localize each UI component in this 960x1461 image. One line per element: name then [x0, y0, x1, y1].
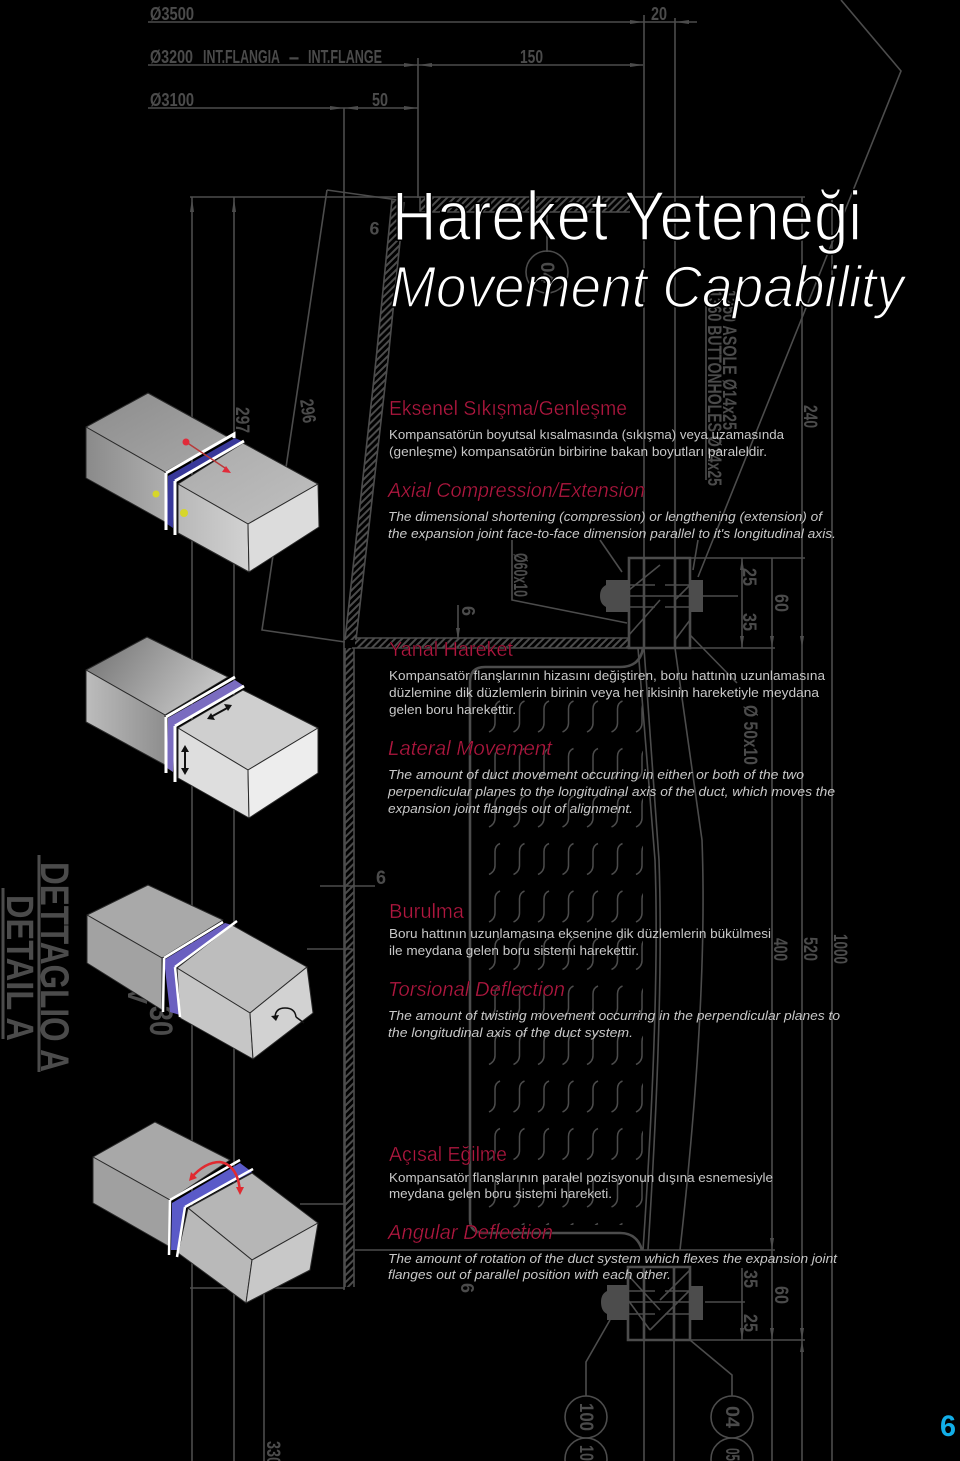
text block: Turkish: ile meydana gelen boru sistemi harekettir. [389, 943, 639, 958]
text block: Turkish [389, 926, 771, 958]
heading: Turkish: Açısal Eğilme [389, 1144, 507, 1166]
dimension labels: 1250 ASOLE Ø14x25 [718, 290, 739, 430]
dimension labels: Ø3100 [150, 90, 194, 110]
text block: English [388, 1008, 840, 1040]
text block: Turkish: düzlemine dik düzlemlerin birinin veya her ikisinin hareketiyle meydana [389, 685, 820, 700]
dimension labels: Ø3200 [150, 47, 193, 67]
dimension labels: 60 [770, 594, 791, 612]
dimension labels: Ø3500 [150, 4, 194, 24]
dimension labels: 35 [738, 613, 759, 631]
text block: English: The amount of duct movement occurring in either or both of the two [388, 767, 804, 782]
text block: English: perpendicular planes to the longitudinal axis of the duct, which moves the [387, 784, 835, 799]
text block: Turkish [389, 427, 785, 459]
dimension labels: V [122, 987, 153, 1004]
text block: Turkish: Kompansatörün boyutsal kısalmasında (sıkışma) veya uzamasında [389, 427, 785, 442]
heading: English: Axial Compression/Extension [387, 480, 645, 502]
heading: English: Torsional Deflection [388, 979, 565, 1001]
dimension labels: 50 [372, 90, 388, 110]
lower flange, bolt and reference balloons [526, 251, 753, 1461]
text block: English: the longitudinal axis of the duct system. [388, 1025, 633, 1040]
icon: axial compression/extension block [86, 393, 319, 572]
dimension labels: 6 [458, 606, 478, 616]
panel: lateral movement text [387, 639, 835, 816]
dimension labels: Ø60x10 [509, 553, 530, 597]
dimension labels: INT.FLANGIA [203, 47, 280, 67]
text block: English [387, 767, 835, 816]
dimension labels [122, 4, 850, 1461]
dimension labels: - [288, 47, 300, 67]
dimension labels: 25 [739, 1314, 760, 1332]
text block: English: flanges out of parallel position with each other. [388, 1267, 671, 1282]
dimension labels: 25 [738, 568, 759, 586]
panel: torsional deflection text [388, 901, 840, 1040]
drawing title: detail A: DETTAGLIO A [32, 862, 76, 1072]
title: Movement Capability [390, 255, 907, 320]
text block: English: The amount of rotation of the duct system which flexes the expansion joint [388, 1251, 838, 1266]
dimension labels: Ø 50x10 [739, 705, 760, 765]
title [390, 177, 907, 320]
heading: Turkish: Yanal Hareket [389, 639, 513, 661]
icon: lateral movement block [86, 637, 318, 818]
icon: torsional deflection block [87, 885, 313, 1059]
heading: English: Lateral Movement [388, 738, 553, 760]
lower flange, bolt and reference balloons: 04 [536, 262, 557, 283]
text block: Turkish [389, 1170, 773, 1201]
dimension labels: 1360 BUTTONHOLES Ø14x25 [703, 290, 724, 486]
dimension lines and extension lines [148, 0, 901, 1461]
lower flange, bolt and reference balloons: 100 [575, 1403, 596, 1431]
dimension labels: 30 [143, 1006, 179, 1036]
drawing title: detail A [0, 855, 76, 1072]
text block: Turkish: Boru hattının uzunlamasına eksenine dik düzlemlerin bükülmesi [389, 926, 771, 941]
dimension labels: 1000 [829, 934, 850, 964]
upper flange and bolt [512, 540, 738, 683]
text block: English: The dimensional shortening (compression) or lengthening (extension) of [388, 509, 823, 524]
title: Hareket Yeteneği [392, 177, 862, 255]
panel: axial movement text [387, 398, 836, 541]
heading: Turkish: Burulma [389, 901, 465, 923]
dimension labels: INT.FLANGE [308, 47, 382, 67]
text block: English [388, 1251, 838, 1282]
text block: Turkish: meydana gelen boru sistemi hareketi. [389, 1186, 612, 1201]
heading: Turkish: Eksenel Sıkışma/Genleşme [389, 398, 627, 420]
dimension labels: 150 [520, 47, 543, 67]
panel: angular deflection text [387, 1144, 838, 1282]
text block: English: The amount of twisting movement occurring in the perpendicular planes to [388, 1008, 840, 1023]
corrugated duct body [470, 648, 703, 1250]
dimension labels: 6 [376, 868, 386, 889]
dimension labels: 20 [651, 4, 667, 24]
dimension labels: 520 [799, 937, 820, 961]
dimension labels: 6 [369, 218, 380, 239]
dimension labels: 60 [770, 1286, 791, 1304]
text block: Turkish: Kompansatör flanşlarının paralel pozisyonun dışına esnemesiyle [389, 1170, 773, 1185]
hatched wall section [345, 197, 775, 1287]
dimension labels: 240 [799, 405, 820, 428]
dimension labels: 296 [295, 398, 319, 424]
dimension labels: 400 [769, 938, 790, 961]
text block: English [388, 509, 836, 541]
dimension labels: 297 [231, 407, 252, 433]
text block: Turkish: gelen boru harekettir. [389, 702, 516, 717]
dimension labels: 6 [457, 1283, 477, 1293]
text block: English: expansion joint flanges out of alignment. [388, 801, 633, 816]
text block: Turkish: (genleşme) kompansatörün birbirine bakan boyutları paraleldir. [389, 444, 767, 459]
lower flange, bolt and reference balloons: 04 [721, 1406, 742, 1428]
text block: Turkish: Kompansatör flanşlarının hizasını değiştiren, boru hattının uzunlamasına [389, 668, 826, 683]
page number: 6 [940, 1410, 956, 1443]
text block: English: the expansion joint face-to-face dimension parallel to it's longitudinal axis. [388, 526, 836, 541]
heading: English: Angular Deflection [387, 1222, 553, 1244]
dimension labels: 35 [739, 1270, 760, 1288]
text block: Turkish [389, 668, 826, 717]
icon: angular deflection block [93, 1122, 318, 1303]
